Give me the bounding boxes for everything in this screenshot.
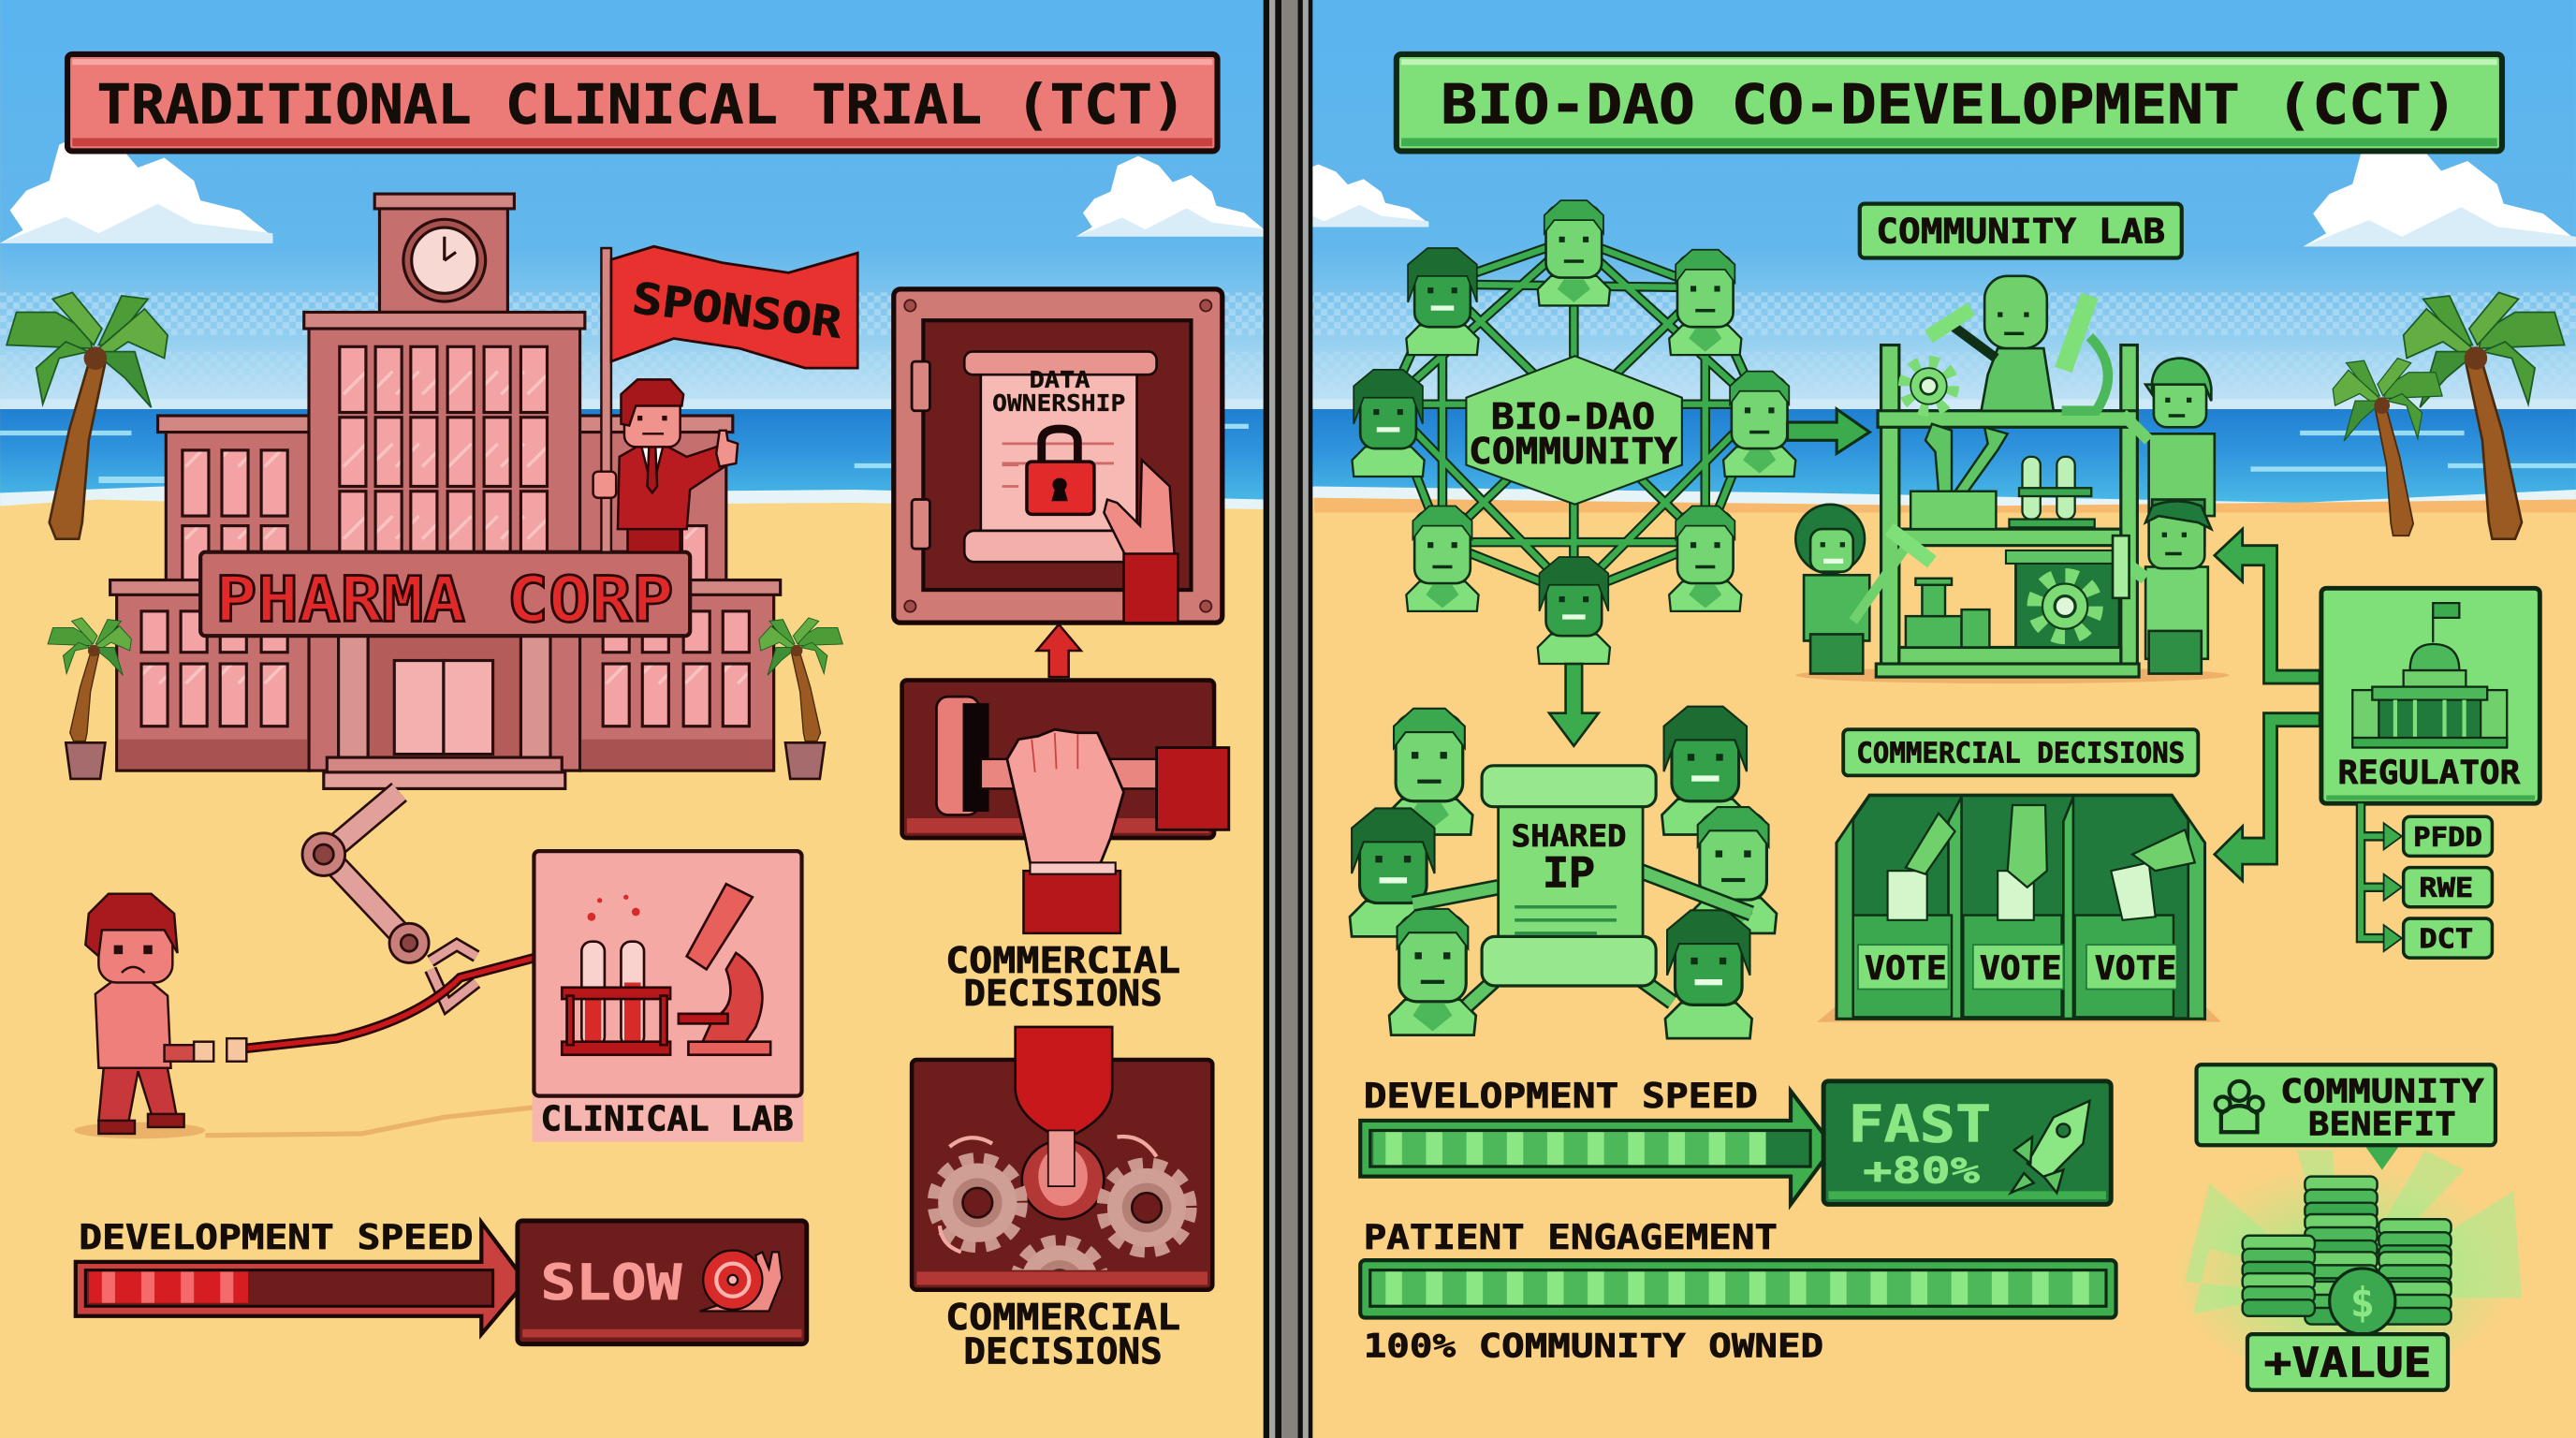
- fast bar track: [1370, 1130, 1810, 1167]
- label: commercial decisions (upper): [945, 940, 1180, 1015]
- building: clock tower: [374, 194, 514, 312]
- lab equipment: [1906, 579, 1989, 647]
- shadow trail: [205, 1108, 534, 1136]
- arrow: regulator to voting: [2215, 713, 2320, 881]
- building: lower wings: [110, 580, 781, 770]
- worker: right with tool: [2113, 501, 2211, 674]
- label: +value: [2247, 1334, 2448, 1390]
- label: community lab: [1860, 204, 2182, 258]
- capitol icon: [2352, 603, 2507, 748]
- scroll: OWNERSHIP: [992, 389, 1125, 417]
- building: middle wings: [158, 416, 733, 594]
- shadow: [1795, 668, 2230, 683]
- fast arrow bar: [1360, 1091, 1834, 1204]
- title: traditional clinical trial: TRADITIONAL CLINICAL TRIAL (TCT): [97, 73, 1186, 137]
- hexagon: bio-dao community: COMMUNITY: [1469, 431, 1678, 473]
- patient in chains: [74, 894, 246, 1138]
- person holding: lower left: [1389, 909, 1476, 1035]
- cloud: left panel upper left: [0, 131, 272, 243]
- test tubes and rack: [562, 942, 670, 1055]
- title: bio-dao co-development: [1397, 54, 2502, 151]
- panel: regulator: [2321, 588, 2539, 803]
- engagement bar fill: [1370, 1270, 2106, 1306]
- coin stack: left: [2243, 1236, 2315, 1316]
- label: commercial decisions (right): COMMERCIAL DECISIONS: [1856, 737, 2185, 770]
- title: traditional clinical trial: [67, 54, 1218, 151]
- label: community lab: COMMUNITY LAB: [1876, 212, 2165, 252]
- vote labels: [1858, 945, 2176, 990]
- vote labels: VOTE: [1980, 949, 2062, 988]
- badge: slow: SLOW: [540, 1255, 682, 1312]
- sponsor flag: [601, 246, 857, 552]
- speech bubble: community benefit: COMMUNITY: [2280, 1073, 2484, 1111]
- coin stack: center: [2305, 1177, 2378, 1325]
- padlock: [1027, 429, 1094, 514]
- badge: slow: [518, 1221, 807, 1344]
- tag: dct: [2404, 918, 2492, 958]
- hand holding scroll: [1104, 460, 1178, 623]
- booth dividers: [1837, 797, 2204, 1019]
- tag: pfdd: [2404, 816, 2492, 856]
- label: commercial decisions (right): [1843, 729, 2198, 775]
- arrow: lever up to vault: [1036, 624, 1081, 677]
- bubbles: [587, 895, 640, 921]
- arms: [1412, 871, 1751, 1005]
- scroll: shared ip: IP: [1543, 849, 1595, 902]
- engagement bar: [1360, 1260, 2116, 1318]
- microscope: [679, 884, 770, 1055]
- palm tree: right beach large: [2404, 292, 2565, 539]
- caption: community owned: 100% COMMUNITY OWNED: [1364, 1328, 1823, 1366]
- worker: left with hammer: [1795, 505, 1932, 674]
- patient engagement: [1360, 1217, 2116, 1366]
- branch arrowheads: [2384, 823, 2402, 951]
- voting hands: [1906, 805, 2195, 888]
- slow arrow bar: [76, 1223, 526, 1334]
- ballots: [1888, 862, 2156, 920]
- icon: people: [2216, 1081, 2263, 1132]
- label: commercial decisions (upper): DECISIONS: [963, 973, 1163, 1015]
- person holding: upper left: [1386, 709, 1472, 835]
- center divider: [1264, 0, 1312, 1438]
- development speed: fast: [1360, 1076, 2111, 1204]
- worker: cap: [2123, 359, 2215, 546]
- member: lower right: [1669, 506, 1741, 611]
- toolbox and wrench: [1910, 424, 2008, 529]
- member: right: [1723, 372, 1795, 477]
- gears panel: [912, 1027, 1212, 1328]
- building: main block: [304, 312, 585, 770]
- scroll: [964, 352, 1157, 562]
- glow: [2172, 1151, 2513, 1380]
- tag: dct: DCT: [2419, 924, 2473, 955]
- label: commercial decisions (upper): COMMERCIAL: [945, 940, 1180, 982]
- dollar coin: $: [2350, 1279, 2375, 1327]
- cable highlight: [246, 958, 534, 1049]
- arrow: community to lab: [1788, 409, 1869, 453]
- rocket: [2011, 1101, 2089, 1193]
- title: bio-dao co-development: BIO-DAO CO-DEVELOPMENT (CCT): [1441, 73, 2458, 137]
- bio-dao network: [1352, 200, 1795, 664]
- potted palm left: [48, 618, 131, 779]
- tag: rwe: RWE: [2419, 873, 2473, 903]
- person holding: middle right: [1690, 807, 1777, 933]
- cloud: left panel upper right: [1076, 156, 1267, 237]
- network links: [1388, 238, 1760, 594]
- development speed: slow: [76, 1217, 807, 1344]
- development speed: slow: DEVELOPMENT SPEED: [79, 1217, 474, 1257]
- scroll: shared ip: [1482, 766, 1656, 986]
- speech bubble: community benefit: [2197, 1064, 2496, 1170]
- regulator branches highlight: [2361, 803, 2392, 938]
- badge: fast +80%: [1823, 1081, 2111, 1204]
- member: bottom: [1538, 557, 1610, 664]
- slow bar fill: [89, 1271, 248, 1303]
- slow bar track: [85, 1270, 493, 1306]
- patient engagement: PATIENT ENGAGEMENT: [1364, 1217, 1778, 1257]
- vote labels: VOTE: [2095, 949, 2176, 988]
- person holding: lower right: [1665, 910, 1752, 1038]
- member: top: [1538, 200, 1610, 305]
- label: commercial decisions (lower): DECISIONS: [963, 1331, 1163, 1373]
- building: entrance doors and steps: [324, 633, 565, 788]
- arms outline: [1412, 871, 1751, 1005]
- scroll: shared ip: SHARED: [1512, 820, 1627, 854]
- hexagon: bio-dao community: BIO-DAO: [1491, 396, 1655, 438]
- lever panel with hand: [902, 681, 1229, 933]
- top gear: [1906, 363, 1952, 409]
- snail: [700, 1251, 782, 1312]
- ballot boxes: [1853, 916, 2174, 1017]
- label: +value: +VALUE: [2263, 1340, 2431, 1387]
- panel: clinical lab: [533, 851, 803, 1142]
- vote labels: VOTE: [1865, 949, 1947, 988]
- person holding: middle left: [1350, 808, 1437, 936]
- sponsor flag: SPONSOR: [630, 273, 845, 348]
- hexagon: bio-dao community: [1466, 356, 1682, 505]
- panel: clinical lab: CLINICAL LAB: [540, 1098, 794, 1138]
- arrow: community to shared ip: [1549, 664, 1599, 746]
- vault: data ownership: [894, 289, 1222, 623]
- label: commercial decisions (lower): [945, 1297, 1180, 1373]
- palm tree: left beach: [7, 292, 168, 539]
- sign: pharma corp: PHARMA CORP: [215, 563, 674, 636]
- arrow: regulator to lab: [2215, 529, 2320, 683]
- sponsor character: [593, 379, 738, 552]
- shelf test tubes: [2009, 457, 2095, 527]
- fast bar fill: [1373, 1132, 1766, 1165]
- member: upper left: [1406, 248, 1479, 355]
- dollar coin: [2330, 1269, 2395, 1334]
- shelf frame: [1876, 345, 2139, 677]
- tag: rwe: [2404, 868, 2492, 907]
- robot arm: [302, 792, 476, 1005]
- label: commercial decisions (lower): COMMERCIAL: [945, 1297, 1180, 1339]
- panel: regulator: REGULATOR: [2337, 754, 2521, 792]
- community benefit: [2172, 1064, 2522, 1390]
- worker: top with hammer and microscope: [1928, 276, 2108, 411]
- cloud: right panel upper right: [2304, 135, 2576, 246]
- community lab shelves: [1795, 276, 2230, 683]
- speech bubble: community benefit: BENEFIT: [2308, 1106, 2456, 1144]
- potted palm right: [759, 618, 842, 779]
- machine panel with gear: [2006, 550, 2119, 647]
- cable restraining patient: [246, 958, 534, 1049]
- palm tree: right beach small: [2333, 359, 2442, 536]
- voting booths: [1817, 795, 2221, 1022]
- person holding: upper right: [1661, 707, 1749, 835]
- coin stack: right: [2378, 1219, 2452, 1325]
- tag: pfdd: PFDD: [2413, 822, 2482, 853]
- shared ip scroll with people: [1350, 707, 1777, 1038]
- member: lower left: [1406, 506, 1479, 611]
- development speed: fast: DEVELOPMENT SPEED: [1364, 1076, 1758, 1116]
- glow rays: [2185, 1151, 2522, 1314]
- badge: fast +80%: +80%: [1863, 1151, 1980, 1193]
- scroll: DATA: [1030, 366, 1090, 393]
- cloud: right panel upper left: [1265, 165, 1428, 227]
- badge: fast +80%: FAST: [1848, 1095, 1991, 1154]
- network links highlight: [1388, 238, 1760, 594]
- member: left: [1352, 370, 1425, 477]
- pharma corp building: [110, 194, 781, 788]
- regulator branches: [2361, 803, 2392, 938]
- member: upper right: [1669, 250, 1741, 355]
